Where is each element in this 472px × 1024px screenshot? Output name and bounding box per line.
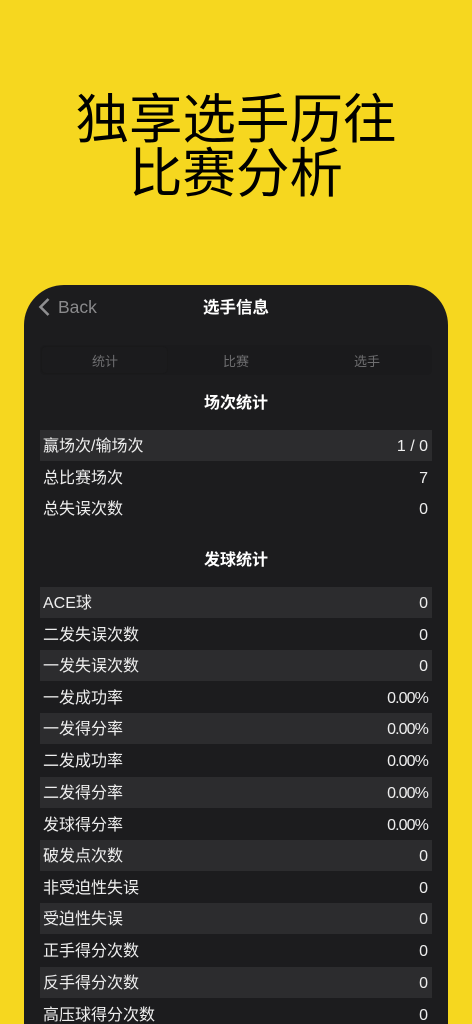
heading: serve stats: 发球统计 (204, 552, 268, 569)
table: serve stats: 受迫性失误 (43, 911, 123, 928)
table: match stats: 总失误次数 (43, 501, 123, 518)
table: serve stats: 0 (419, 627, 428, 644)
table: serve stats: 破发点次数 (43, 848, 123, 865)
selected tab (41, 346, 168, 374)
table: serve stats: 0 (419, 880, 428, 897)
table: serve stats: 0.00% (387, 690, 428, 707)
title: 独享选手历往 (76, 91, 396, 150)
table: match stats: 0 (419, 501, 428, 518)
table: serve stats: 0 (419, 1007, 428, 1024)
table: match stats: 7 (419, 470, 428, 487)
table: serve stats: 二发失误次数 (43, 627, 139, 644)
table: serve stats: 0 (419, 595, 428, 612)
table: serve stats: 非受迫性失误 (43, 880, 139, 897)
table: serve stats: 发球得分率 (43, 817, 123, 834)
table: serve stats: 高压球得分次数 (43, 1007, 155, 1024)
table: serve stats: 0 (419, 658, 428, 675)
table: match stats: 1 / 0 (397, 438, 428, 455)
table: match stats: 赢场次/输场次 (43, 438, 143, 455)
table: serve stats: 正手得分次数 (43, 943, 139, 960)
table: serve stats (40, 587, 432, 1024)
title (76, 91, 396, 204)
table: serve stats: 0 (419, 943, 428, 960)
table: serve stats: 一发失误次数 (43, 658, 139, 675)
table: serve stats: 二发成功率 (43, 753, 123, 770)
table: serve stats: 0 (419, 975, 428, 992)
table: serve stats: 反手得分次数 (43, 975, 139, 992)
back label: Back (58, 297, 97, 317)
table: serve stats: 0.00% (387, 817, 428, 834)
table: serve stats: 0 (419, 911, 428, 928)
tab: players: 选手 (354, 354, 380, 369)
table: match stats (40, 430, 432, 518)
table: serve stats: 一发成功率 (43, 690, 123, 707)
title: 比赛分析 (129, 145, 343, 204)
panel: phone screen background (24, 285, 448, 1024)
tab: matches: 比赛 (223, 354, 249, 369)
table: serve stats: 0.00% (387, 785, 428, 802)
table: serve stats: 二发得分率 (43, 785, 123, 802)
tab: statistics: 统计 (92, 354, 118, 369)
table: serve stats: ACE球 (43, 595, 92, 612)
heading: match stats: 场次统计 (204, 395, 268, 412)
icon: back chevron (38, 298, 50, 316)
table: serve stats: 0 (419, 848, 428, 865)
table: serve stats: 0.00% (387, 753, 428, 770)
tab bar (40, 345, 432, 375)
table: serve stats: 一发得分率 (43, 721, 123, 738)
screen heading: 选手信息 (203, 299, 269, 317)
table: match stats: 总比赛场次 (43, 470, 123, 487)
table: serve stats: 0.00% (387, 721, 428, 738)
